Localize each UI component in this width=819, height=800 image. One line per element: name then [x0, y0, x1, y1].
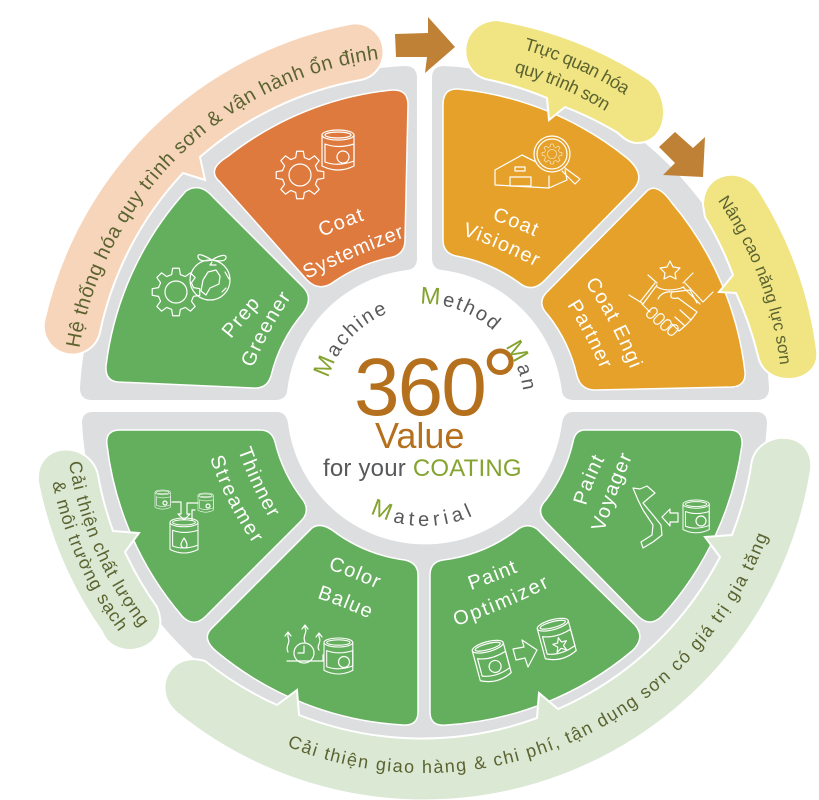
centre title: 360 Value for your COATING: for your COATING [323, 455, 522, 482]
callout: visualise process (yellow): quy trình sơn [516, 64, 608, 111]
icon: gear and paint can [276, 130, 354, 199]
panel: Thinner Streamer [106, 429, 308, 623]
label: Paint Optimizer [454, 560, 546, 624]
centre title: 360 Value for your COATING: 360 [354, 342, 485, 433]
panel: Coat Engi Partner [541, 188, 746, 391]
label: Coat Systemizer [303, 208, 402, 278]
grey ring backing [80, 66, 769, 747]
icon: heating with clock and can [285, 625, 353, 674]
panel: Prep Greener [105, 187, 310, 389]
curved word: Material: Material [372, 498, 472, 526]
label: Thinner Streamer: Thinner [240, 446, 278, 516]
label: Paint Voyager: Voyager [590, 452, 631, 528]
panel: Paint Voyager [540, 429, 743, 623]
callout: standardise process (peach): Hệ thống hóa quy trình sơn & vận hành ổn định [66, 46, 378, 347]
label: Paint Voyager [573, 452, 631, 528]
centre title: 360 Value for your COATING: ° [481, 329, 519, 436]
arrow: to visualise process [395, 17, 455, 73]
callout: raise coating capability (yellow) [702, 176, 816, 378]
centre title: 360 Value for your COATING [323, 329, 522, 482]
label: Prep Greener [221, 292, 290, 366]
callout: delivery, cost and value-added paint (green): Cải thiện giao hàng & chi phí, tận dụng sơn có giá trị gia tăng [289, 533, 770, 775]
label: Coat Visioner: Coat [494, 208, 539, 236]
icon: can upgrade arrow to star can [471, 616, 577, 685]
label: Prep Greener: Prep [221, 299, 258, 338]
icon: factory under magnifier [495, 136, 580, 188]
label: Coat Systemizer: Coat [319, 208, 364, 235]
curved word: Method: Method [422, 287, 502, 330]
callout: raise coating capability (yellow): Nâng cao năng lực sơn [718, 195, 789, 364]
curved word: Man: Man [506, 340, 534, 390]
label: Coat Visioner [466, 208, 540, 265]
label: Prep Greener: Greener [242, 292, 290, 366]
callout: quality and clean environment (green): Cải thiện chất lượng [70, 462, 148, 628]
label: Color Balue [318, 558, 381, 617]
icon: handshake with star [629, 261, 713, 337]
label: Coat Systemizer: Systemizer [303, 227, 402, 278]
label: Color Balue: Balue [318, 585, 371, 617]
panel: Coat Visioner [442, 88, 640, 288]
panel: Color Balue [206, 524, 419, 726]
label: Coat Visioner: Visioner [466, 222, 540, 265]
label: Thinner Streamer [211, 446, 278, 541]
label: Paint Voyager: Paint [573, 454, 604, 504]
centre title: 360 Value for your COATING: Value [375, 415, 464, 456]
icon: Vietnam map, arrow and can [633, 486, 709, 548]
label: Coat Engi Partner: Coat Engi [588, 278, 644, 368]
label: Coat Engi Partner: Partner [568, 299, 610, 366]
arrow: to raise capability [659, 132, 705, 177]
panel: Coat Systemizer [214, 89, 409, 288]
label: Thinner Streamer: Streamer [211, 456, 262, 541]
callout: visualise process (yellow): Trực quan hóa [526, 38, 628, 95]
label: Paint Optimizer: Paint [468, 560, 518, 590]
icon: gear and green globe [152, 255, 230, 316]
callout: quality and clean environment (green): & môi trường sạch [53, 482, 126, 631]
curved word: Machine: Machine [313, 305, 386, 376]
callout: visualise process (yellow) [466, 21, 663, 144]
panel: Paint Optimizer [429, 525, 640, 726]
callout: quality and clean environment (green) [38, 450, 162, 649]
icon: three cans with pipes [155, 490, 213, 553]
label: Color Balue: Color [330, 558, 381, 587]
label: Paint Optimizer: Optimizer [454, 577, 546, 624]
